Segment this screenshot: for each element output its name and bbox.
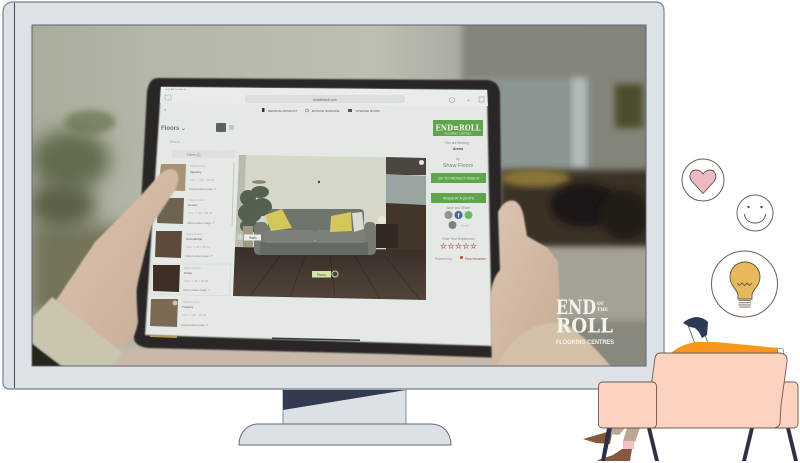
end of the roll watermark logo: THE: [597, 307, 609, 313]
floor tag: Floors: [317, 273, 326, 277]
product info column: by: [456, 157, 460, 161]
left arm: [598, 382, 656, 428]
list labels: Size: 7.48 × 48.96: [186, 245, 211, 249]
product info column: [443, 142, 473, 167]
sofa back: [640, 353, 787, 428]
wall tag: Walls: [249, 236, 257, 240]
swatch: tuscany: [150, 299, 178, 327]
powered by: FloorVisualizer: [465, 257, 487, 261]
rear shoe: [583, 428, 613, 444]
tablet toolbar: CHANGE ROOM: [356, 109, 380, 113]
tablet toolbar: REMOVE PRODUCT: [268, 109, 298, 113]
right hand: [490, 200, 561, 366]
wall marker: [318, 181, 320, 183]
video screen photo: [20, 15, 660, 375]
list labels: Size: 7.48 × 48.96: [190, 178, 215, 182]
tablet screen: [145, 87, 492, 346]
share buttons: [444, 206, 472, 229]
browser bar: endoftheroll.com: [313, 98, 337, 102]
stand base: [239, 424, 451, 445]
floors heading and controls: Filters (1): [187, 153, 200, 157]
logo badge: [433, 120, 483, 136]
end of the roll watermark logo: END: [556, 295, 596, 319]
home indicator: [272, 338, 360, 341]
floors heading and controls: [161, 123, 235, 158]
swatch: stonebridge: [155, 231, 182, 258]
tablet toolbar: [164, 108, 380, 112]
list labels: Arrow: [184, 271, 193, 275]
selected row outline: [150, 264, 231, 296]
list labels: [181, 164, 217, 327]
logo badge: END≡ROLL: [436, 122, 481, 132]
floors heading and controls: Floors ⌄: [161, 126, 186, 132]
swatch: arrow: [153, 265, 180, 292]
shirt: [671, 342, 778, 354]
left sleeve: [33, 297, 122, 367]
logo badge: FLOORING CENTRES: [445, 132, 472, 136]
request a quote button: [431, 193, 486, 203]
end of the roll watermark logo: FLOORING CENTRES: [556, 340, 614, 346]
bezel inner line: [14, 3, 16, 388]
room window: [386, 174, 426, 205]
product info column: Arrow: [453, 147, 463, 151]
list labels: Visit product page ↗: [185, 254, 213, 258]
list labels: Visit product page ↗: [189, 187, 217, 191]
rating stars: Rate Your Experience: [443, 237, 475, 241]
yellow cushions: [265, 209, 292, 231]
list labels: Size: 7.48 × 48.96: [182, 313, 207, 317]
plant: [238, 180, 272, 233]
screen border: [32, 25, 646, 366]
list labels: Shaw Floors: [184, 266, 201, 270]
floors heading and controls: Search: [170, 140, 180, 144]
share buttons: Email: [461, 224, 469, 228]
sofa legs: [601, 428, 798, 461]
list labels: Shaw Floors: [190, 164, 207, 168]
sofa: [254, 209, 376, 255]
tablet toolbar: ROTATE SURFACE: [312, 109, 340, 113]
sock: [623, 441, 634, 449]
browser bar: +: [467, 98, 470, 104]
go to product page button: [431, 173, 486, 183]
side table and lamp: [376, 216, 398, 248]
rating stars: ★: [470, 242, 477, 250]
wall tag: [237, 234, 261, 240]
icon: heart bubble: [682, 159, 724, 201]
go to product page button: GO TO PRODUCT PAGE ⧉: [438, 176, 480, 180]
icon: smiley bubble: [737, 195, 773, 231]
end of the roll watermark logo: OF: [597, 301, 605, 307]
rating stars: ★: [448, 242, 454, 250]
list labels: Stonebridge: [186, 237, 203, 241]
list labels: Tapestry: [190, 170, 202, 174]
list labels: Visit product page ↗: [187, 221, 215, 225]
monitor frame: [3, 2, 664, 389]
right arm: [770, 382, 798, 428]
settings gear: [419, 160, 424, 165]
blurred room background: [20, 15, 660, 375]
room floor: [233, 247, 426, 300]
sofa illustration: [598, 353, 798, 461]
list labels: Shaw Floors: [188, 198, 205, 202]
end of the roll watermark logo: ROLL: [556, 314, 613, 338]
monitor stand: [239, 389, 451, 445]
right hand and sleeve: [490, 200, 612, 368]
tablet body: [134, 78, 503, 358]
swatch: next: [150, 335, 177, 338]
end of the roll watermark logo: [556, 295, 614, 346]
list labels: Size: 7.48 × 48.96: [188, 211, 213, 215]
list labels: Tuscany: [182, 305, 194, 309]
hair: [683, 317, 708, 338]
share buttons: f: [458, 214, 460, 220]
shirt cuff: [777, 348, 784, 354]
powered by: Powered by: [435, 257, 452, 261]
right sleeve: [497, 321, 612, 368]
product list: [150, 163, 234, 338]
plant stool: [243, 226, 253, 247]
left hand: [55, 169, 178, 347]
share buttons: Save and Share:: [446, 206, 471, 210]
stand neck: [283, 389, 406, 424]
sleeve shadow: [30, 342, 63, 367]
room preview: [233, 155, 426, 300]
stand shadow: [283, 390, 406, 410]
rating stars: ★: [440, 242, 447, 250]
neck and face: [688, 325, 708, 344]
tablet toolbar: ×: [164, 107, 167, 112]
floor planks: [250, 256, 420, 300]
left hand and sleeve: [30, 169, 178, 367]
list scrollbar: [232, 163, 234, 226]
swatch: tapestry: [158, 164, 186, 191]
request a quote button: REQUEST A QUOTE: [443, 196, 475, 200]
rating stars: ★: [463, 242, 469, 250]
tablet: [134, 78, 503, 358]
browser bar: [160, 87, 488, 106]
rating stars: [440, 238, 477, 249]
browser bar: 10:25 AM Tue Mar 14: [165, 88, 187, 91]
list labels: Size: 7.48 × 48.96: [184, 279, 209, 283]
icon: light bulb bubble: [712, 251, 778, 317]
product info column: Shaw Floors: [443, 163, 474, 169]
favourite marker: [172, 300, 178, 306]
rear trouser: [609, 428, 625, 435]
front shoe: [598, 449, 632, 461]
swatch: armory: [157, 198, 184, 224]
powered by: [435, 256, 487, 261]
floor tag: [312, 271, 338, 278]
product info column: You are viewing: [445, 141, 469, 145]
list labels: Shaw Floors: [186, 232, 203, 236]
bezel: [3, 2, 664, 389]
room wall: [235, 155, 426, 250]
rating stars: ★: [455, 242, 462, 250]
list labels: Armory: [188, 203, 198, 207]
list labels: Visit product page ↗: [183, 288, 211, 292]
front trouser: [623, 428, 640, 442]
person sitting on sofa: [583, 317, 784, 461]
list labels: Shaw Floors: [183, 300, 200, 304]
list labels: Visit product page ↗: [181, 323, 209, 327]
